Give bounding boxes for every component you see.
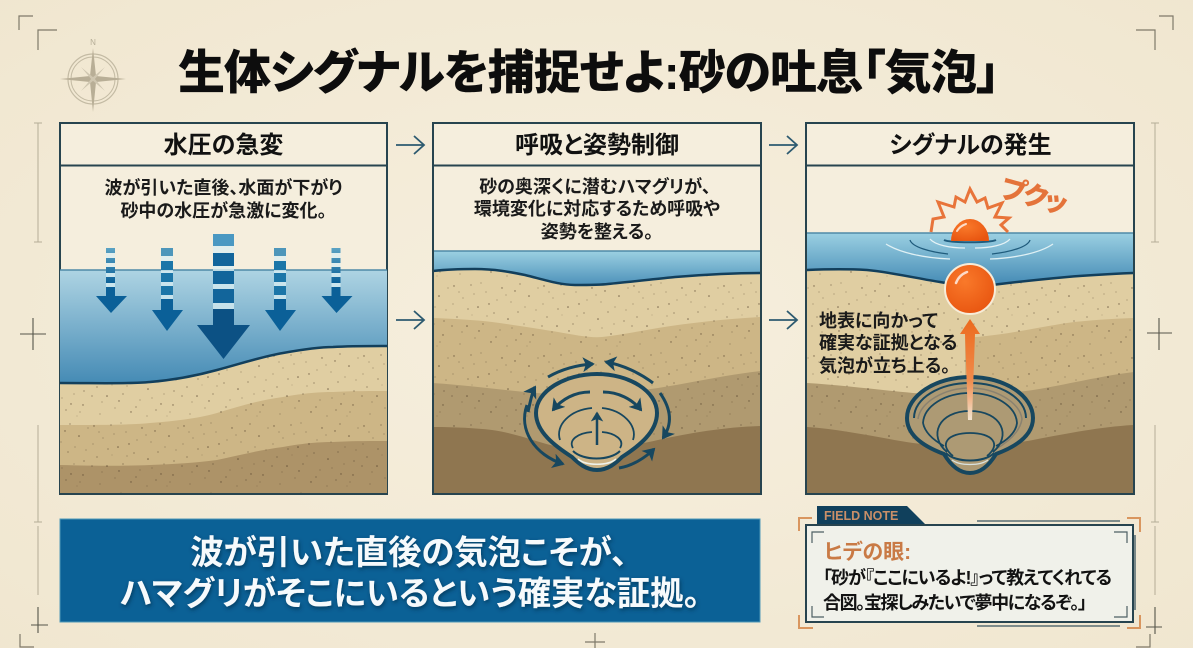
rising bubble [945, 264, 995, 314]
banner: conclusion: ハマグリがそこにいるという確実な証拠。 [120, 575, 700, 613]
text: rising bubble description: 確実な証拠となる [819, 333, 957, 353]
label: field note tab: FIELD NOTE [824, 509, 898, 523]
sand and water cross-section [433, 251, 761, 494]
text: field note quote [823, 567, 1112, 613]
panel: field note [799, 506, 1140, 628]
sand and water cross-section [806, 233, 1134, 494]
label: bubbling sound: プクッ [997, 173, 1071, 220]
heading: breathing and posture: 呼吸と姿勢制御 [515, 132, 679, 159]
icon: compass rose [60, 38, 126, 112]
water and sand cross-section [60, 270, 387, 494]
text: water pressure description: 砂中の水圧が急激に変化。 [120, 200, 327, 221]
panel: signal generation [806, 123, 1134, 494]
ripples [886, 239, 1053, 259]
text: breathing description: 砂の奥深くに潜むハマグリが、 [479, 176, 711, 197]
panel: breathing and posture [433, 123, 761, 494]
arrow: panel 2 to 3 top [769, 136, 797, 154]
icon: buried clam [907, 377, 1033, 473]
text: field note quote: 「砂が『ここにいるよ!』って教えてくれてる [823, 567, 1112, 588]
arrow: panel 2 to 3 lower [769, 311, 797, 329]
arrow: panel 1 to 2 lower [396, 311, 424, 329]
heading: water pressure: 水圧の急変 [164, 132, 283, 159]
surface bubble [951, 219, 989, 241]
text: field note quote: 合図。宝探しみたいで夢中になるぞ。」 [823, 593, 1087, 613]
banner: conclusion: 波が引いた直後の気泡こそが、 [190, 534, 628, 572]
icon: clam with movement arrows [525, 362, 669, 470]
heading: Hide's eye: ヒデの眼: [824, 540, 911, 564]
text: rising bubble description: 地表に向かって [819, 311, 938, 331]
text: rising bubble description: 気泡が立ち上る。 [819, 355, 950, 376]
icon: compass rose: N [90, 38, 96, 47]
panel: water pressure [60, 123, 387, 494]
text: breathing description: 姿勢を整える。 [541, 222, 653, 242]
banner: conclusion [60, 519, 760, 622]
burst around surface bubble [931, 189, 1009, 232]
heading: signal generation: シグナルの発生 [889, 131, 1052, 159]
arrows: downward pressure [96, 234, 352, 359]
arrow: bubble rising [960, 319, 980, 420]
arrow: panel 1 to 2 top [396, 136, 424, 154]
text: water pressure description: 波が引いた直後、水面が下がり [104, 177, 343, 198]
text: breathing description: 環境変化に対応するため呼吸や [474, 199, 720, 219]
title: 生体シグナルを捕捉せよ:砂の吐息「気泡」 [178, 46, 1000, 99]
